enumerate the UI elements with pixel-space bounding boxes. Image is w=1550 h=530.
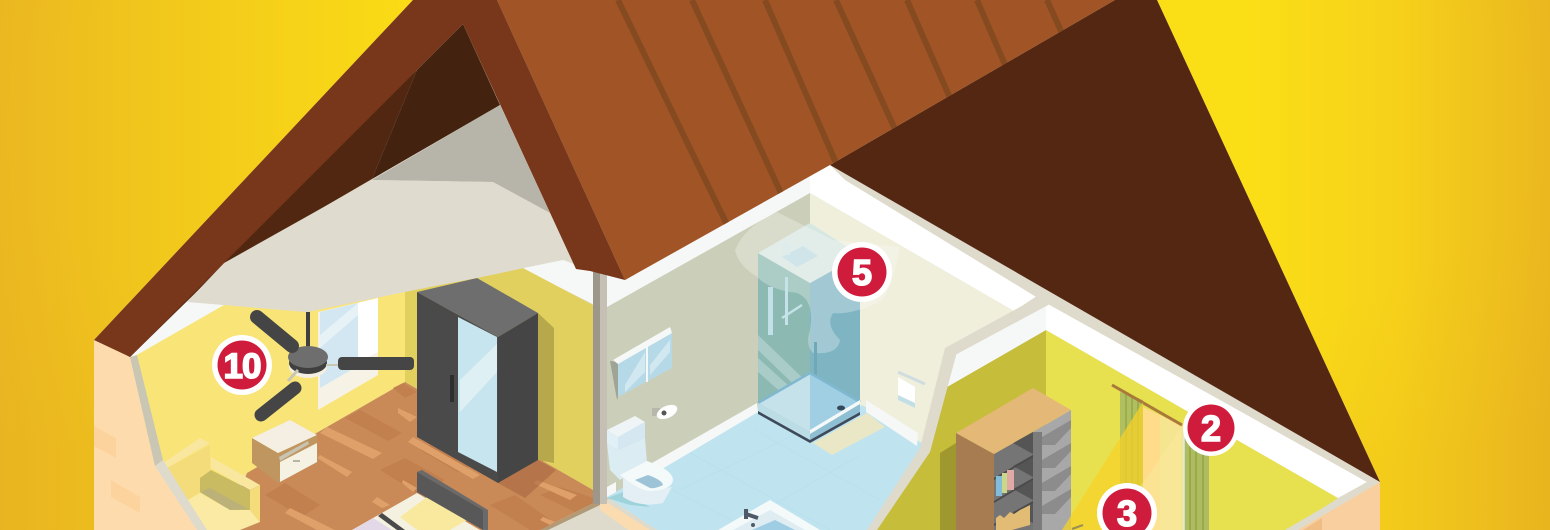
panel: bedroom with ceiling fan xyxy=(130,258,600,530)
badge: number 5: 5 xyxy=(852,252,872,293)
front roof face xyxy=(497,0,1115,280)
sunbeam xyxy=(1062,402,1143,530)
upper bedroom white band xyxy=(947,303,1046,387)
beige roof trim xyxy=(830,165,1380,482)
badge: number 2: 2 xyxy=(1201,408,1221,449)
shower head and rail xyxy=(782,246,818,267)
bath mat xyxy=(813,413,885,455)
bathroom floor xyxy=(607,405,925,530)
bright right wall xyxy=(1046,330,1338,530)
bed xyxy=(352,470,488,530)
toilet roll xyxy=(652,402,680,422)
badge: number 2 xyxy=(1183,400,1239,456)
wood floor xyxy=(225,382,600,530)
nightstand xyxy=(252,420,318,483)
partition cut edge xyxy=(867,348,957,530)
armchair xyxy=(163,438,260,530)
panel: bedroom with bookcase and curtains xyxy=(870,330,1338,530)
badge: number 10: 10 xyxy=(224,347,261,386)
panel: exterior walls xyxy=(94,340,1380,530)
curtains and window xyxy=(1062,385,1209,530)
wardrobe xyxy=(417,278,554,483)
left bedroom wall xyxy=(130,292,405,530)
bathtub xyxy=(718,500,820,530)
panel: roof xyxy=(94,0,1380,482)
roof seams xyxy=(618,0,1066,235)
bookcase shadow xyxy=(940,443,956,530)
white wall band xyxy=(130,298,224,357)
steam xyxy=(735,212,900,353)
shower xyxy=(735,212,900,443)
badge: number 5 xyxy=(832,242,892,302)
badge: number 3 xyxy=(1097,483,1157,530)
panel: attic and ceiling xyxy=(130,24,590,357)
bookcase xyxy=(956,388,1071,530)
window xyxy=(610,327,672,400)
panel: bathroom xyxy=(540,160,1046,530)
toilet xyxy=(607,416,673,507)
right corner trim xyxy=(1285,482,1380,530)
panel: cut walls and trim xyxy=(130,165,1380,530)
window xyxy=(318,298,378,410)
right roof slope xyxy=(830,0,1380,482)
bathroom right wall xyxy=(810,193,1014,450)
towel rail xyxy=(898,372,925,408)
bedroom left cut edge xyxy=(130,355,163,466)
gable fascia xyxy=(94,0,625,357)
baseboards xyxy=(652,403,758,472)
shower tray xyxy=(758,373,810,432)
central wall xyxy=(593,272,600,504)
right bedroom wall xyxy=(405,268,593,490)
bathroom back wall xyxy=(607,180,810,500)
badge: number 10 xyxy=(212,335,272,395)
white band under right roof xyxy=(1046,295,1367,498)
ceiling fan xyxy=(257,312,414,415)
olive left wall xyxy=(870,330,1046,530)
